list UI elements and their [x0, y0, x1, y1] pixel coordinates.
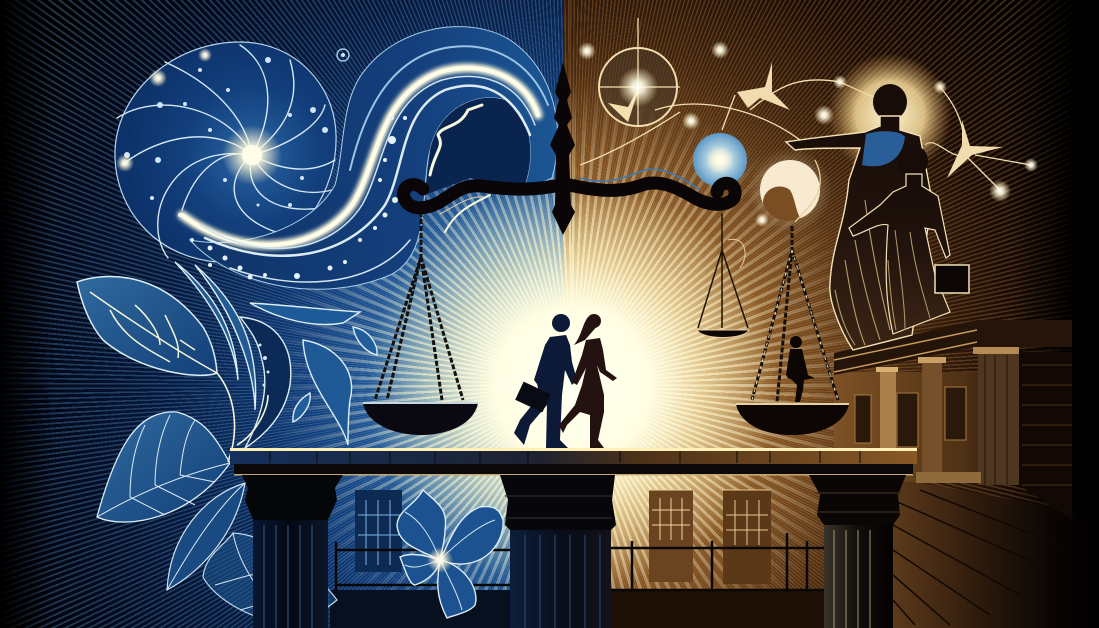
galaxy swirl	[115, 42, 336, 262]
leaf: slender stems	[175, 262, 377, 462]
spiral arms	[117, 45, 335, 258]
lightning bolt	[430, 105, 490, 232]
right floor	[893, 478, 1099, 628]
leaf: lower large	[97, 412, 230, 522]
scale right chains and pan	[736, 226, 849, 435]
lower windows	[355, 490, 771, 584]
window: building	[855, 387, 966, 447]
leaf: large upper	[77, 277, 217, 375]
woman walking	[559, 314, 617, 448]
column: center	[500, 475, 616, 628]
columns: building	[876, 347, 1019, 485]
column: right	[809, 475, 906, 628]
galaxy stars	[124, 57, 328, 217]
man with briefcase	[514, 314, 577, 448]
railings	[335, 533, 826, 592]
botanical leaves	[77, 262, 377, 625]
couple silhouettes walking	[514, 314, 617, 448]
figure: child	[849, 145, 969, 334]
cosmic symbols on right	[578, 18, 1038, 227]
scale left chains and pan	[363, 205, 478, 435]
star dots on slender leaf	[258, 344, 270, 386]
small figure on right pan	[786, 336, 815, 402]
leaf: translucent bottom	[203, 533, 337, 625]
figure: tall robed	[786, 84, 932, 350]
statue figures on right	[786, 53, 969, 350]
roof eaves	[834, 320, 1072, 375]
scale beam and central post	[404, 62, 735, 235]
small pan on right scale	[697, 213, 749, 338]
leaf: lower slim	[167, 483, 245, 590]
small planet	[337, 49, 349, 61]
flower	[397, 490, 503, 618]
glowing orbs	[693, 133, 832, 232]
star dots trail	[190, 116, 407, 280]
right building with portico	[834, 320, 1072, 520]
pedestal top	[230, 448, 917, 476]
flowing wave ribbon	[182, 27, 558, 289]
dark floors between columns	[330, 590, 826, 628]
column: left	[242, 475, 343, 628]
columns	[242, 475, 906, 628]
